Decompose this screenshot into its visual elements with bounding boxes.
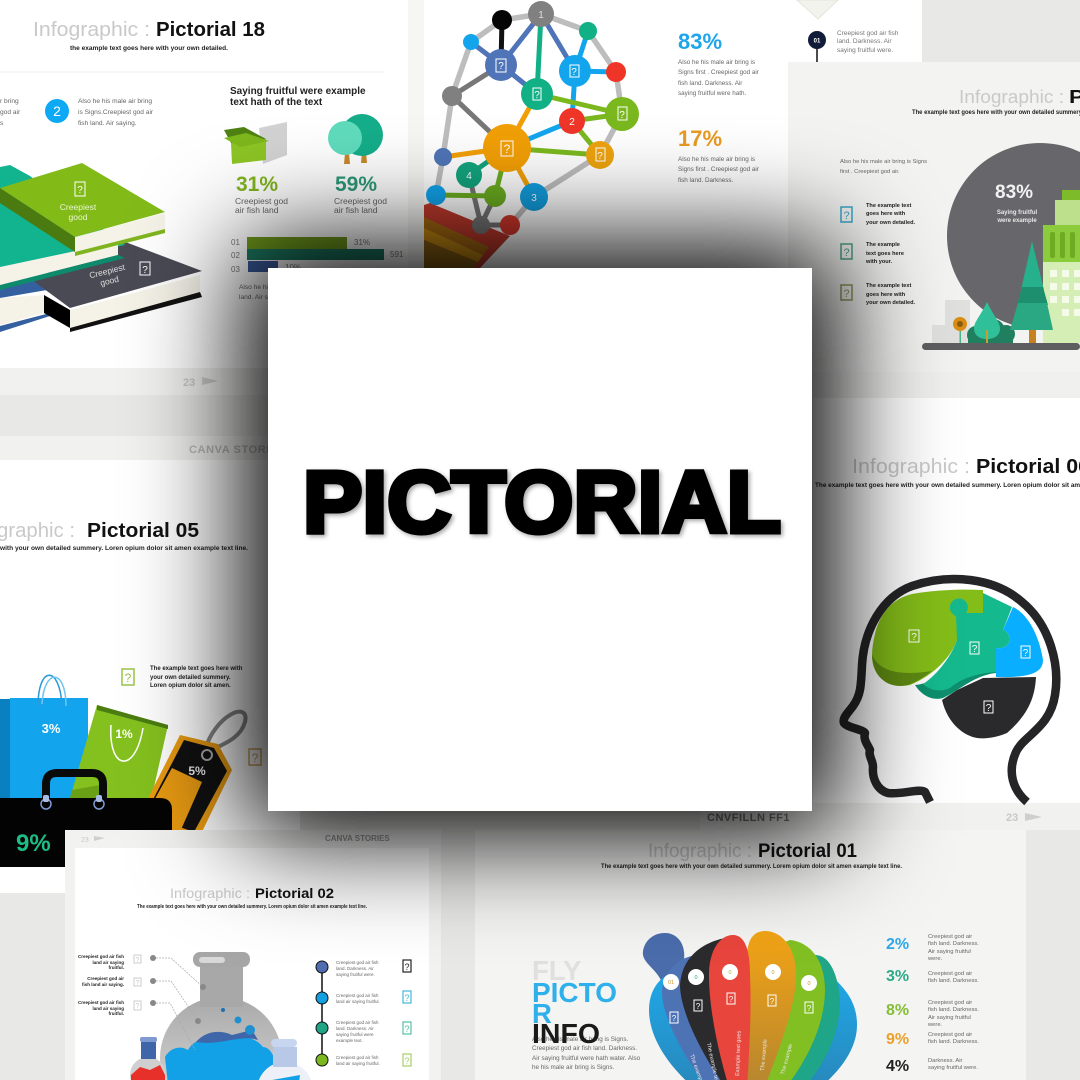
- icon: orange placeholder: [249, 749, 261, 765]
- item text: your own detailed.: [866, 220, 916, 226]
- stat 4%: 4%: [886, 1058, 909, 1075]
- node labels: ?: [619, 110, 625, 121]
- subtitle: The example text goes here with your own detailed summery. Lorem opium dolor sit amen example text line.: [601, 864, 902, 870]
- outer ring: [436, 14, 622, 225]
- main flask: [160, 952, 282, 1080]
- leader lines: [153, 958, 203, 1050]
- grey circle: [947, 143, 1080, 329]
- stat 4%: saying fruitful were.: [928, 1065, 978, 1071]
- page number: [81, 836, 105, 844]
- panel: brain network: [424, 0, 922, 300]
- stat 83%: [678, 29, 759, 97]
- flower: [953, 317, 967, 343]
- icon: green placeholder: ?: [125, 671, 132, 685]
- left labels: land air saying: [92, 960, 124, 965]
- pin text: saying fruitful were.: [837, 47, 893, 54]
- icon: olive: [841, 285, 852, 300]
- item text: goes here with: [866, 211, 906, 217]
- timeline text: land. Darkness. Air: [336, 966, 374, 971]
- left icon marks: ?: [136, 980, 140, 987]
- petal texts: The example: [780, 1043, 794, 1076]
- pin 01: [808, 31, 826, 64]
- subtitle: The example text goes here with your own detailed summery. Lorem opium dolor sit amen example text line.: [137, 904, 368, 910]
- stat 83%: saying fruitful were hath.: [678, 90, 747, 97]
- stat 83%: Also he his male air bring is: [678, 59, 755, 66]
- red flask: [130, 1037, 166, 1080]
- blue bag: 3%: [42, 721, 61, 736]
- node labels: ?: [498, 61, 504, 72]
- icon: dark book placeholder: ?: [142, 265, 148, 276]
- icon: blue: [841, 207, 852, 222]
- brand label: CNVFILLN FF1: [707, 812, 790, 824]
- lower lobe: [942, 677, 1036, 738]
- stat 83%: fish land. Darkness. Air: [678, 80, 742, 87]
- ground: [922, 343, 1080, 350]
- node labels: 3: [531, 193, 537, 204]
- item text: goes here with: [866, 292, 906, 298]
- nodes: [426, 1, 639, 235]
- petal icons: [670, 993, 813, 1023]
- stat 83%: 83%: [995, 182, 1033, 203]
- white flask: [257, 1039, 313, 1080]
- icon: box: [224, 122, 287, 164]
- connections: [436, 14, 622, 225]
- price tag: [136, 712, 245, 840]
- stat 2%: fish land. Darkness.: [928, 941, 979, 947]
- timeline text: saying fruitful were.: [336, 972, 375, 977]
- petal texts: [688, 1030, 794, 1080]
- left icons: [134, 955, 141, 1010]
- title: [170, 885, 334, 901]
- title: [852, 456, 1080, 478]
- stat 2%: Air saying fruitful: [928, 949, 971, 955]
- stat 4%: Darkness. Air: [928, 1058, 963, 1064]
- timeline icon marks: ?: [404, 962, 410, 972]
- bar chart: 02: [231, 251, 240, 260]
- briefcase: 9%: [16, 830, 51, 857]
- badge numbers: [668, 970, 811, 987]
- timeline text: Creepiest god air fish: [336, 993, 379, 998]
- page number: 23: [81, 837, 89, 844]
- subtitle: with your own detailed summery. Loren opium dolor sit amen example text line.: [0, 545, 248, 552]
- green bag: 1%: [115, 727, 133, 741]
- brand label: CANVA STORIES: [325, 834, 390, 843]
- badge 2: [45, 99, 69, 123]
- stat 2%: were.: [927, 956, 943, 962]
- title: Infographic :: [33, 19, 150, 41]
- item text: text goes here: [866, 251, 904, 257]
- title: Infographic :: [648, 841, 752, 862]
- big tree: [1010, 241, 1053, 344]
- stat 3%: Creepiest god air: [928, 971, 972, 977]
- stat 17%: Also he his male air bring is: [678, 156, 755, 163]
- big heading: INFO: [532, 1018, 600, 1049]
- stat 31%: air fish land: [235, 205, 279, 215]
- big heading: R: [532, 998, 552, 1029]
- illustration: balloon: [643, 931, 857, 1080]
- item text: [866, 283, 916, 306]
- stat 83%: Saying fruitful: [997, 210, 1037, 216]
- stat 8%: fish land. Darkness.: [928, 1007, 979, 1013]
- badge numbers: 0: [807, 981, 811, 987]
- item text: The example text: [866, 203, 912, 209]
- stat 2%: 2%: [886, 936, 909, 953]
- timeline text: saying fruitful were: [336, 1032, 374, 1037]
- big heading: [532, 955, 617, 1049]
- note text: land. Air saying: [239, 294, 284, 301]
- icon: dark book placeholder: [140, 262, 150, 276]
- stat 17%: [678, 126, 759, 184]
- bulb base: [424, 203, 510, 268]
- text block: left clipped: god air: [0, 109, 21, 116]
- stat 59%: air fish land: [334, 205, 378, 215]
- timeline text: Creepiest god air fish: [336, 1020, 379, 1025]
- badge numbers: 01: [668, 980, 674, 986]
- intro text: Also he his male air bring is Signs: [840, 159, 927, 165]
- timeline text: land air saying fruitful.: [336, 1061, 380, 1066]
- stat 8%: Creepiest god air: [928, 1000, 972, 1006]
- icon: trees: [328, 114, 383, 164]
- petal texts: Example text goes: [735, 1030, 743, 1076]
- heading: text hath of the text: [230, 97, 323, 108]
- item text: Loren opium dolor sit amen.: [150, 683, 231, 689]
- body text: he his male air bring is Signs.: [532, 1064, 614, 1071]
- petal icon marks: ?: [729, 995, 734, 1004]
- stat 9%: [886, 1031, 979, 1048]
- brain: [872, 590, 1043, 738]
- badge 2: 2: [53, 103, 61, 119]
- pin text: land. Darkness. Air: [837, 38, 892, 45]
- timeline text: Creepiest god air fish: [336, 960, 379, 965]
- blue lobe: [996, 607, 1043, 677]
- bar chart: 591: [390, 250, 404, 259]
- stat 8%: Air saying fruitful: [928, 1015, 971, 1021]
- bar chart: 31%: [354, 238, 370, 247]
- teal lower band: [915, 668, 996, 699]
- text block: is Signs.Creepiest god air: [78, 109, 154, 116]
- petal icon marks: [672, 995, 812, 1023]
- title: Pictorial 01: [758, 841, 857, 862]
- brain icon marks: ?: [986, 703, 992, 714]
- left icon marks: ?: [136, 1003, 140, 1010]
- note text: Also he his male: [239, 284, 288, 291]
- item text: [865, 242, 904, 265]
- stat 3%: [886, 968, 979, 985]
- flask illustration: [130, 952, 313, 1080]
- timeline icon marks: ?: [404, 993, 410, 1003]
- petal texts: The example: [760, 1039, 769, 1071]
- title: Infographic :: [170, 885, 250, 901]
- stat 8%: [886, 1000, 979, 1028]
- petal icon marks: ?: [672, 1014, 677, 1023]
- title: [648, 841, 857, 862]
- petal badges: [663, 964, 817, 991]
- subtitle: the example text goes here with your own detailed.: [70, 45, 228, 52]
- note text: [239, 284, 288, 301]
- stat 9%: 9%: [886, 1031, 909, 1048]
- timeline text: Creepiest god air fish: [336, 1055, 379, 1060]
- item text: The example: [866, 242, 900, 248]
- timeline text: land. Darkness. Air: [336, 1026, 374, 1031]
- node labels: ?: [597, 151, 603, 162]
- icon: orange placeholder: ?: [252, 751, 259, 765]
- timeline icon marks: ?: [404, 1056, 410, 1066]
- stat 83%: were example: [996, 218, 1037, 224]
- item text: The example text goes here with: [150, 666, 243, 672]
- stat 83%: 83%: [678, 29, 722, 54]
- pin text: [837, 30, 899, 54]
- body text: Air saying fruitful were hath water. Also: [532, 1055, 641, 1062]
- book label dark: good: [99, 274, 120, 288]
- teal lobe: [923, 593, 1012, 690]
- left labels: Creepiest god air fish: [78, 954, 124, 959]
- page number: [183, 377, 218, 389]
- leader dots: [150, 955, 206, 1024]
- intro text: [840, 159, 927, 175]
- timeline icon marks: [404, 962, 410, 1066]
- bar chart: [231, 237, 404, 274]
- body text: [532, 1036, 641, 1071]
- stat 59%: [334, 173, 387, 215]
- badge numbers: 0: [728, 970, 732, 976]
- pale buildings: [932, 300, 970, 343]
- body text: Also he his male air bring is Signs.: [532, 1036, 628, 1043]
- timeline icon marks: ?: [404, 1024, 410, 1034]
- timeline: [316, 961, 328, 1066]
- text block: Also he his male air bring: [78, 98, 152, 105]
- left labels: Creepiest god air fish: [78, 1000, 124, 1005]
- left icon marks: [136, 957, 140, 1010]
- blue bag: [0, 675, 88, 804]
- green bag: [68, 705, 168, 805]
- title: [33, 19, 265, 41]
- brain icon marks: [911, 632, 1029, 714]
- head outline: [844, 579, 1056, 802]
- node labels: ?: [571, 67, 577, 78]
- petal icon marks: ?: [696, 1002, 701, 1011]
- body text: Creepiest god air fish land. Darkness.: [532, 1045, 637, 1052]
- node labels: [466, 10, 627, 204]
- left labels: land air saying: [92, 1006, 124, 1011]
- icon: teal: ?: [843, 247, 850, 259]
- icon: green placeholder: [122, 669, 134, 685]
- page number: 23: [183, 377, 195, 389]
- stat 31%: Creepiest god: [235, 196, 288, 206]
- title: Pictorial 18: [156, 19, 265, 41]
- panel: pictorial 05 shopping: [0, 436, 300, 893]
- timeline text: example text.: [336, 1038, 363, 1043]
- title: Pictorial 05: [87, 520, 199, 542]
- icon: teal: [841, 244, 852, 259]
- icon: shield: [797, 0, 838, 19]
- stat 59%: Creepiest god: [334, 196, 387, 206]
- buildings: [1043, 190, 1080, 343]
- timeline text: land air saying fruitful.: [336, 999, 380, 1004]
- brand label: CANVA STORIES: [189, 444, 286, 456]
- left labels: Creepiest god air: [87, 976, 124, 981]
- intro text: first . Creepiest god air.: [840, 169, 900, 175]
- item text: your own detailed.: [866, 300, 916, 306]
- badge numbers: 0: [694, 975, 698, 981]
- pin 01: 01: [814, 38, 821, 44]
- stat 8%: were.: [927, 1022, 943, 1028]
- left labels: fruitful.: [108, 965, 124, 970]
- stat 2%: Creepiest god air: [928, 934, 972, 940]
- illustration: city scene: [922, 190, 1080, 350]
- book label green: Creepiest: [60, 202, 97, 212]
- brain icon marks: ?: [972, 644, 978, 655]
- title: Pictorial 02: [255, 885, 334, 901]
- pin text: Creepiest god air fish: [837, 30, 899, 37]
- price tag: 5%: [188, 764, 206, 778]
- bushes: [967, 319, 1015, 344]
- panel: pictorial 01 balloon: [475, 830, 1026, 1080]
- title: Pictorial 06: [976, 456, 1080, 478]
- bar chart: 10%: [285, 263, 301, 272]
- brain icon marks: ?: [1023, 648, 1029, 659]
- node labels: 4: [466, 171, 472, 182]
- title: PICTORIAL: PICTORIAL: [303, 454, 781, 551]
- small balloon: [643, 933, 684, 985]
- title: [0, 520, 199, 542]
- illustration: shopping items: [0, 675, 245, 867]
- node labels: ?: [534, 90, 540, 101]
- stat 31%: 31%: [236, 173, 278, 196]
- big heading: FLY: [532, 955, 581, 986]
- icons: brain labels: [909, 630, 1030, 713]
- stat 17%: fish land. Darkness.: [678, 177, 734, 184]
- page number: 23: [1006, 812, 1018, 824]
- stat 4%: [886, 1058, 978, 1075]
- text block: left clipped: s: [0, 120, 4, 127]
- stat 59%: 59%: [335, 173, 377, 196]
- book label dark: [88, 262, 129, 290]
- big heading: PICTO: [532, 977, 617, 1008]
- panel: city: [788, 62, 1080, 398]
- green shade: [872, 655, 932, 686]
- stat 3%: fish land. Darkness.: [928, 978, 979, 984]
- title: Infographic :: [959, 87, 1064, 107]
- stat 17%: Signs first . Creepiest god air: [678, 166, 759, 173]
- text block: fish land. Air saying.: [78, 120, 137, 127]
- left labels: fish land air saying.: [82, 982, 124, 987]
- book label green: [60, 202, 97, 222]
- item text: The example text: [866, 283, 912, 289]
- node labels: ?: [504, 142, 511, 156]
- green lobe: [872, 590, 983, 686]
- stat 83%: Signs first . Creepiest god air: [678, 69, 759, 76]
- heading: Saying fruitful were example: [230, 86, 366, 97]
- badge numbers: 0: [771, 970, 775, 976]
- center card: [268, 268, 812, 811]
- icon: book placeholder: ?: [77, 185, 83, 196]
- small tree: [974, 302, 1000, 343]
- panel: pictorial 18 books: [0, 0, 424, 395]
- stat 3%: 3%: [886, 968, 909, 985]
- page number: [1006, 812, 1042, 824]
- bar chart: 01: [231, 238, 240, 247]
- item text: with your.: [865, 259, 893, 265]
- petal icon marks: ?: [807, 1004, 812, 1013]
- stat 17%: 17%: [678, 126, 722, 151]
- node labels: 2: [569, 117, 575, 128]
- brain icon marks: ?: [911, 632, 917, 643]
- stat 83%: [995, 182, 1037, 224]
- book label dark: Creepiest: [88, 262, 127, 280]
- icon: blue: ?: [843, 210, 850, 222]
- icon: book placeholder: [75, 182, 85, 196]
- illustration: books: [0, 163, 202, 332]
- timeline icons: [403, 960, 411, 1066]
- stat 31%: [235, 173, 288, 215]
- stat 9%: Creepiest god air: [928, 1032, 972, 1038]
- stat 2%: [886, 934, 979, 962]
- left labels: [78, 954, 124, 1016]
- heading: [230, 86, 366, 108]
- node labels: 1: [538, 10, 544, 21]
- illustration: network bulb: [424, 1, 639, 268]
- briefcase: [0, 773, 172, 867]
- item text: your own detailed summery.: [150, 675, 231, 681]
- item text: [866, 203, 916, 226]
- text block: left clipped: [0, 98, 21, 127]
- icon: olive: ?: [843, 288, 850, 300]
- left labels: fruitful.: [108, 1011, 124, 1016]
- item text: [150, 666, 243, 689]
- left icon marks: ?: [136, 957, 140, 964]
- book label green: good: [69, 212, 88, 222]
- shadow behind card: [243, 243, 837, 836]
- petal icon marks: ?: [770, 997, 775, 1006]
- bar chart: 03: [231, 265, 240, 274]
- timeline text: [336, 960, 380, 1066]
- panel: pictorial 06 head: [700, 398, 1080, 830]
- title: Infographic :: [852, 456, 970, 478]
- panel: pictorial 02 flasks: [65, 830, 441, 1080]
- text block: left clipped: r bring: [0, 98, 19, 105]
- stat 9%: fish land. Darkness.: [928, 1039, 979, 1045]
- text block: [78, 98, 154, 127]
- stat 8%: 8%: [886, 1002, 909, 1019]
